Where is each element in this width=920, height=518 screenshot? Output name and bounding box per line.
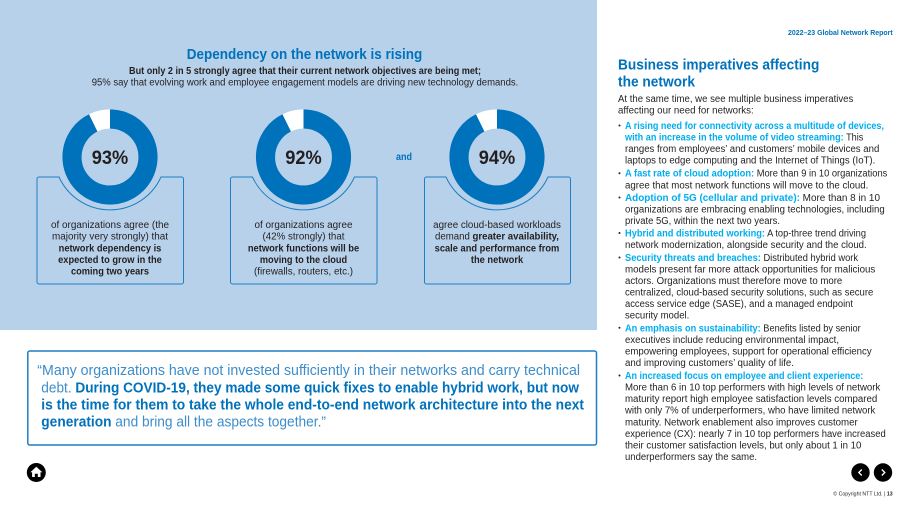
panel: dependency on the network — [0, 0, 597, 330]
bullet: 5G: organizations are embracing enabling technologies, including — [625, 205, 885, 216]
heading: business imperatives — [618, 56, 819, 91]
icon: home button — [27, 463, 46, 482]
bullet: security: access service edge (SASE), and a managed endpoint — [625, 299, 853, 310]
icon: next arrow — [874, 463, 892, 482]
bullet: sustainability: empowering employees, support for operational efficiency — [625, 347, 872, 358]
donut chart: 92% — [266, 119, 342, 195]
bullet: cloud adoption: agree that most network functions will move to the cloud. — [625, 180, 868, 191]
card: 94% — [424, 119, 570, 284]
donut chart: 94%: 94% — [479, 147, 515, 169]
bullet list — [618, 121, 887, 463]
bullet: security: actors. Organizations must therefore move to more — [625, 276, 842, 287]
card text — [248, 220, 360, 278]
bullet: hybrid working: network modernization, alongside security and the cloud. — [625, 240, 867, 251]
card: 93% — [37, 119, 184, 284]
donut chart: 92%: 92% — [285, 147, 322, 169]
bullet: sustainability: An emphasis on sustainability: Benefits listed by senior — [625, 323, 861, 334]
quote callout: is the time for them to take the whole end-to-end network architecture into the next — [41, 397, 584, 413]
bullet: employee and client experience: maturity. Network enablement also improves customer — [625, 417, 858, 428]
bullet: hybrid working: Hybrid and distributed working: A top-three trend driving — [625, 228, 866, 240]
donut chart: 94% — [459, 119, 535, 195]
bullet: connectivity: laptops to edge computing and the Internet of Things (IoT). — [625, 156, 875, 167]
footer copyright: © Copyright NTT Ltd. | 13 — [833, 491, 893, 498]
bullet: employee and client experience: More than 6 in 10 top performers with high levels of network — [625, 383, 880, 394]
bullet: connectivity: with an increase in the volume of video streaming: This — [624, 133, 863, 144]
bullet: hybrid working — [618, 228, 867, 251]
quote callout: generation and bring all the aspects together.” — [41, 415, 326, 431]
bullet: employee and client experience — [618, 371, 886, 463]
quote callout — [28, 351, 597, 445]
label: and: and — [396, 152, 412, 163]
bullet: 5G: Adoption of 5G (cellular and private): More than 8 in 10 — [625, 193, 881, 204]
report label: 2022–23 Global Network Report — [788, 30, 893, 37]
bullet: 5G — [618, 193, 885, 227]
bullet: connectivity: A rising need for connectivity across a multitude of devices, — [625, 121, 884, 132]
subheading: 95% say that evolving work and employee engagement models are driving new technology demands. — [92, 78, 518, 89]
bullet: connectivity: ranges from employees’ and customers’ mobile devices and — [625, 144, 879, 155]
card text: moving to the cloud — [260, 255, 347, 266]
intro text — [618, 94, 853, 117]
bullet: employee and client experience: with only 7% of underperformers, who have limited network — [624, 406, 875, 417]
subheading: But only 2 in 5 strongly agree that their current network objectives are being met; — [129, 66, 481, 77]
heading: dependency: Dependency on the network is rising — [187, 47, 422, 63]
quote callout: “Many organizations have not invested sufficiently in their networks and carry technical — [37, 363, 580, 379]
intro text: At the same time, we see multiple business imperatives — [618, 94, 853, 105]
card text: coming two years — [71, 267, 149, 278]
bullet: 5G: private 5G, within the next two years. — [625, 216, 780, 227]
card text: expected to grow in the — [58, 255, 162, 266]
bullet: employee and client experience: An increased focus on employee and client experience: — [625, 371, 863, 382]
bullet: sustainability: executives include reducing environmental impact, — [625, 335, 839, 346]
bullet: security: centralized, cloud-based security solutions, such as secure — [625, 288, 873, 299]
card text — [433, 220, 561, 266]
bullet: employee and client experience: underperformers say the same. — [625, 452, 757, 463]
card text: scale and performance from — [435, 243, 560, 254]
card text: majority very strongly) that — [52, 232, 168, 243]
bullet: employee and client experience: maturity report high employee satisfaction levels compared — [625, 394, 877, 405]
card text: (firewalls, routers, etc.) — [254, 267, 353, 278]
heading: business imperatives: Business imperatives affecting — [618, 56, 819, 73]
bullet: cloud adoption: A fast rate of cloud adoption: More than 9 in 10 organizations — [625, 169, 887, 180]
card text — [51, 220, 169, 278]
card text: of organizations agree (the — [51, 220, 169, 231]
bullet: security — [618, 253, 875, 322]
card text: (42% strongly) that — [262, 232, 345, 243]
quote callout: debt. During COVID-19, they made some quick fixes to enable hybrid work, but now — [41, 380, 580, 396]
bullet: sustainability: and improving customers’ quality of life. — [625, 358, 794, 369]
card text: network functions will be — [248, 243, 360, 254]
bullet: security: Security threats and breaches: Distributed hybrid work — [625, 253, 858, 264]
icon: previous arrow — [851, 463, 870, 482]
card text: of organizations agree — [254, 220, 352, 231]
heading: business imperatives: the network — [618, 74, 696, 91]
intro text: affecting our need for networks: — [618, 106, 754, 117]
bullet: sustainability — [618, 323, 872, 369]
bullet: connectivity — [618, 121, 884, 167]
bullet: employee and client experience: their customer satisfaction levels, but only about 1 in 10 — [625, 441, 862, 452]
card text: network dependency is — [59, 243, 161, 254]
donut chart: 93% — [72, 119, 148, 195]
card: 92% — [230, 119, 377, 284]
bullet: security: security model. — [625, 311, 689, 322]
subheading — [92, 66, 518, 89]
card text: demand greater availability, — [435, 232, 559, 243]
bullet: cloud adoption — [618, 169, 887, 191]
donut chart: 93%: 93% — [92, 147, 128, 169]
bullet: security: models present far more attack opportunities for malicious — [625, 265, 875, 276]
card text: agree cloud-based workloads — [433, 220, 561, 231]
bullet: employee and client experience: experience (CX): nearly 7 in 10 top performers have increased — [625, 429, 886, 440]
card text: the network — [471, 255, 524, 266]
